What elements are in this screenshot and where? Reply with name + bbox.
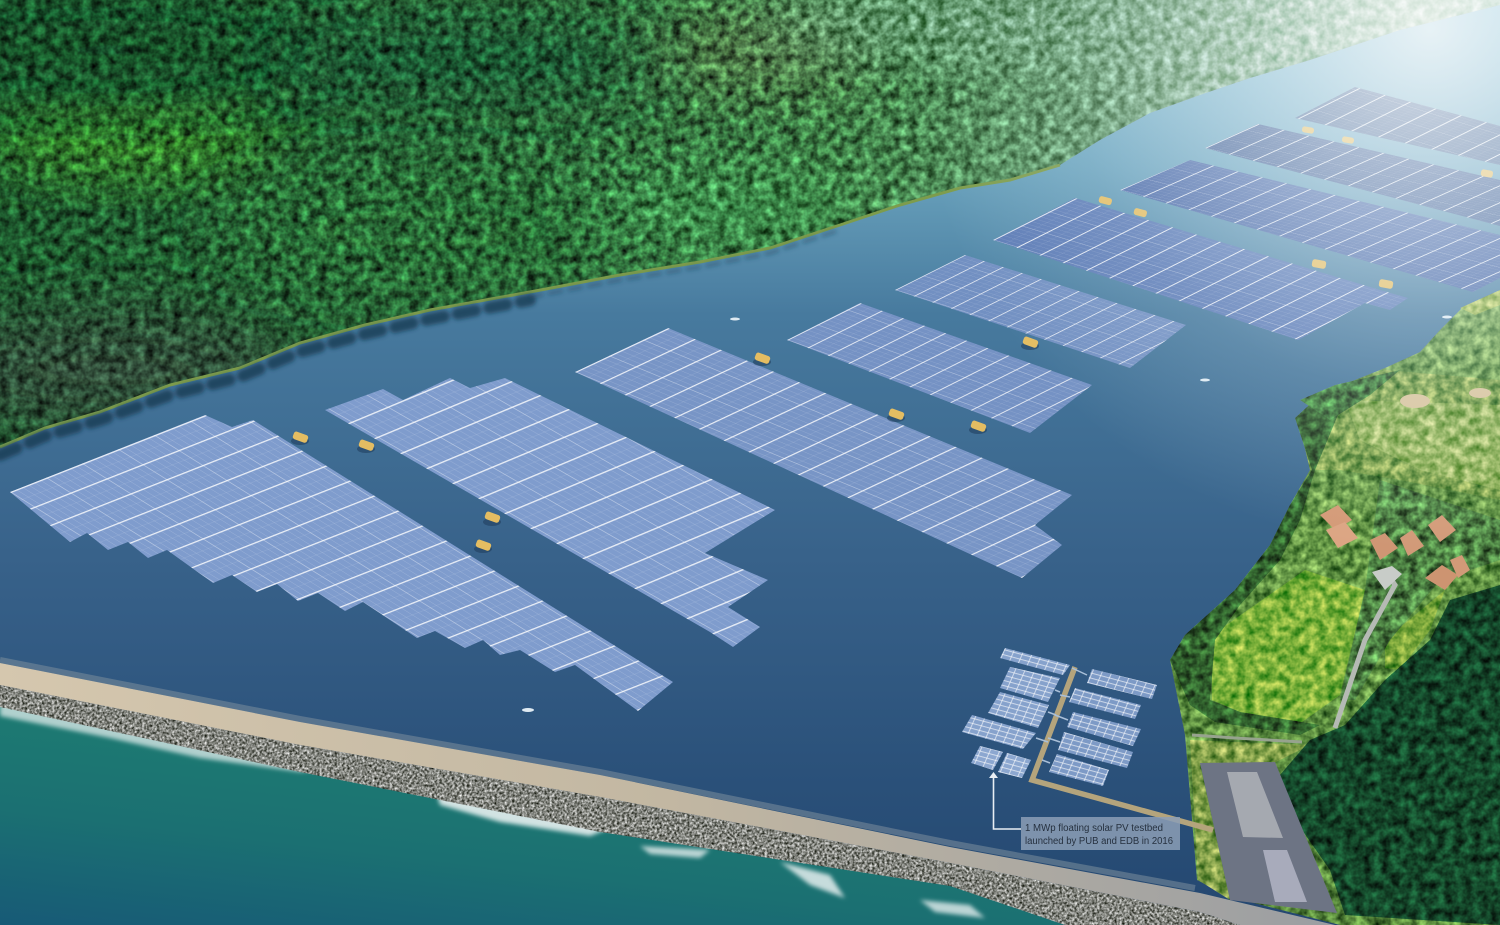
solar array G <box>1120 160 1500 292</box>
power facility yard <box>1200 762 1337 913</box>
dam road <box>0 663 1335 925</box>
solar array I <box>1295 87 1500 165</box>
walkway to testbed <box>1032 667 1213 830</box>
callout: testbed label: 1 MWp floating solar PV testbed <box>1025 823 1163 834</box>
forest hillside <box>0 0 1500 447</box>
solar array E <box>895 255 1186 368</box>
solar array A <box>10 415 673 711</box>
solar array C <box>575 328 1072 578</box>
facility building 2 <box>1263 850 1307 902</box>
callout: testbed label: launched by PUB and EDB in 2016 <box>1025 836 1174 847</box>
shoreline grass and tree reflections <box>0 165 1060 455</box>
surf foam <box>0 702 985 918</box>
1 MWp testbed panels <box>962 648 1157 786</box>
dam rock revetment <box>0 685 1240 925</box>
access road <box>1335 570 1395 728</box>
villas <box>1320 505 1470 590</box>
small boats <box>522 316 1452 712</box>
sea <box>0 700 1065 925</box>
golf bunkers <box>1400 388 1491 408</box>
solar array B <box>325 378 775 647</box>
callout arrow <box>989 772 1021 829</box>
side track <box>1192 735 1302 742</box>
solar array D <box>787 303 1092 433</box>
testbed connectors <box>1036 668 1087 763</box>
facility building 1 <box>1227 772 1283 838</box>
callout: testbed label <box>1021 817 1180 850</box>
solar array F <box>993 198 1408 340</box>
tree belts <box>1170 395 1340 735</box>
dark forest <box>1280 585 1500 925</box>
yellow inverter floats <box>291 126 1493 553</box>
right bank land <box>1170 290 1500 925</box>
inner rock edge <box>0 660 1195 888</box>
solar array H <box>1205 124 1500 226</box>
